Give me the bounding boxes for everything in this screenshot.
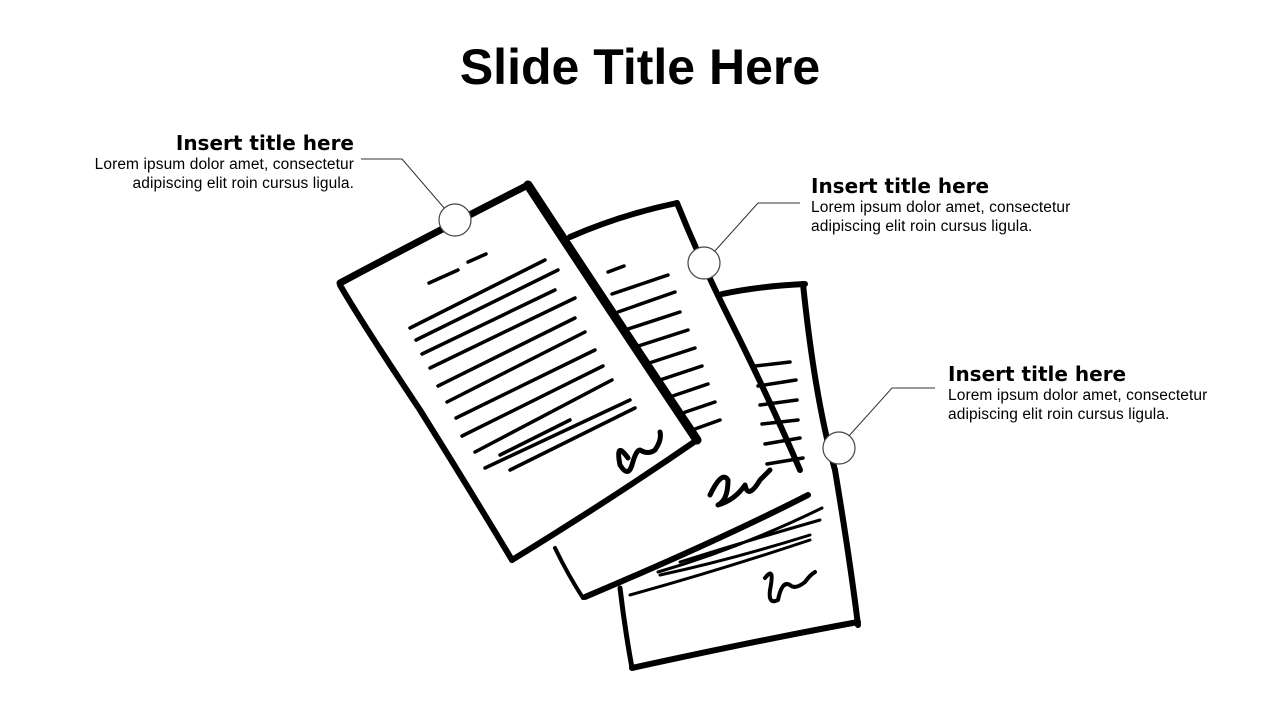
text block 2: Lorem ipsum dolor amet, consectetur <box>811 199 1070 216</box>
text block 3: Insert title here <box>948 362 1126 386</box>
marker 2 <box>688 247 720 279</box>
title: Slide Title Here <box>460 39 820 95</box>
text block 1: Insert title here <box>176 131 354 155</box>
leader 1 <box>361 159 445 209</box>
text block 1: adipiscing elit roin cursus ligula. <box>133 175 354 192</box>
marker 3 <box>823 432 855 464</box>
text block 2: Insert title here <box>811 174 989 198</box>
text block 1: Lorem ipsum dolor amet, consectetur <box>95 156 354 173</box>
text block 1 <box>95 131 354 192</box>
front paper <box>340 185 697 560</box>
text block 3: Lorem ipsum dolor amet, consectetur <box>948 387 1207 404</box>
text block 3 <box>948 362 1208 423</box>
leader 2 <box>714 203 800 252</box>
back paper <box>620 284 858 668</box>
text block 2: adipiscing elit roin cursus ligula. <box>811 218 1032 235</box>
text block 2 <box>811 174 1070 235</box>
middle paper <box>555 203 808 598</box>
text block 3: adipiscing elit roin cursus ligula. <box>948 406 1169 423</box>
leader 3 <box>848 388 935 437</box>
marker 1 <box>439 204 471 236</box>
